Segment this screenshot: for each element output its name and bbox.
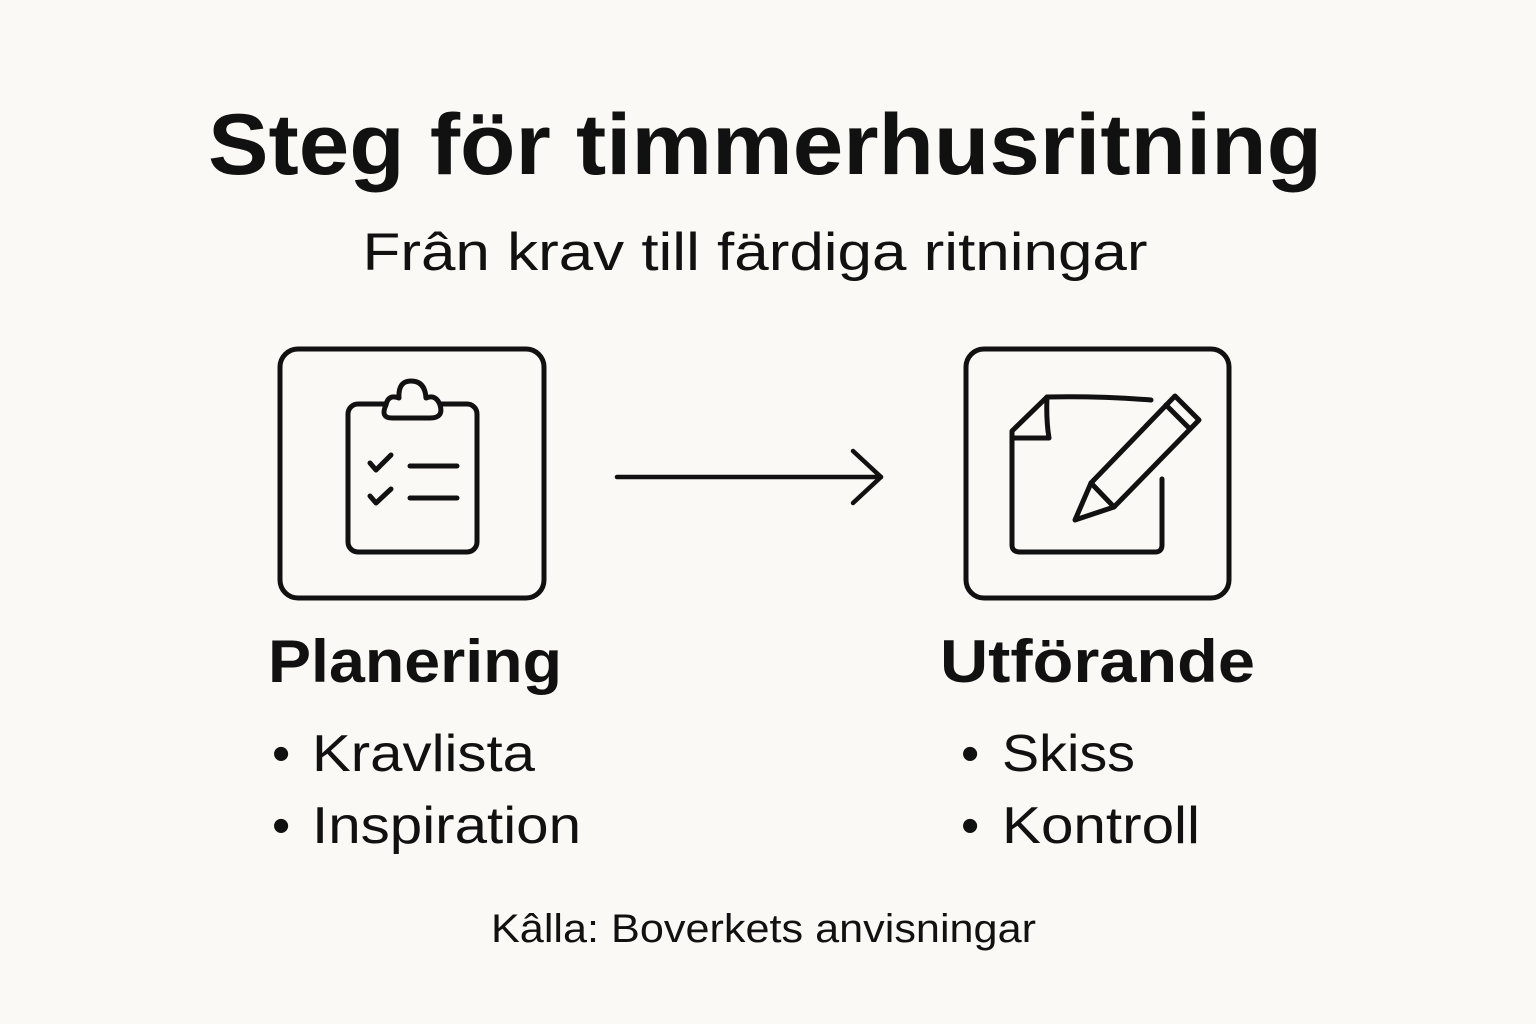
list: planering bullets: Inspiration: [312, 797, 581, 855]
panel: utforande icon box: [966, 349, 1229, 598]
icon: clipboard: [348, 381, 477, 552]
icon: paper and pencil: [1012, 396, 1199, 552]
list: planering bullets: Kravlista: [312, 725, 535, 783]
list: utforande bullets: Skiss: [1002, 725, 1135, 783]
arrow: [617, 451, 881, 503]
list: planering bullets: •: [272, 725, 290, 783]
heading: Planering: Planering: [268, 628, 562, 695]
list: utforande bullets: •: [961, 725, 979, 783]
list: utforande bullets: [961, 725, 1200, 855]
list: planering bullets: •: [272, 797, 290, 855]
panel: planering icon box: [280, 349, 544, 598]
subtitle: Frân krav till färdiga ritningar: [362, 223, 1148, 282]
list: planering bullets: [272, 725, 581, 855]
list: utforande bullets: Kontroll: [1002, 797, 1200, 855]
title: Steg för timmerhusritning: [208, 97, 1322, 193]
list: utforande bullets: •: [961, 797, 979, 855]
source note: Kâlla: Boverkets anvisningar: [491, 907, 1036, 951]
heading: Utförande: Utförande: [940, 628, 1255, 695]
